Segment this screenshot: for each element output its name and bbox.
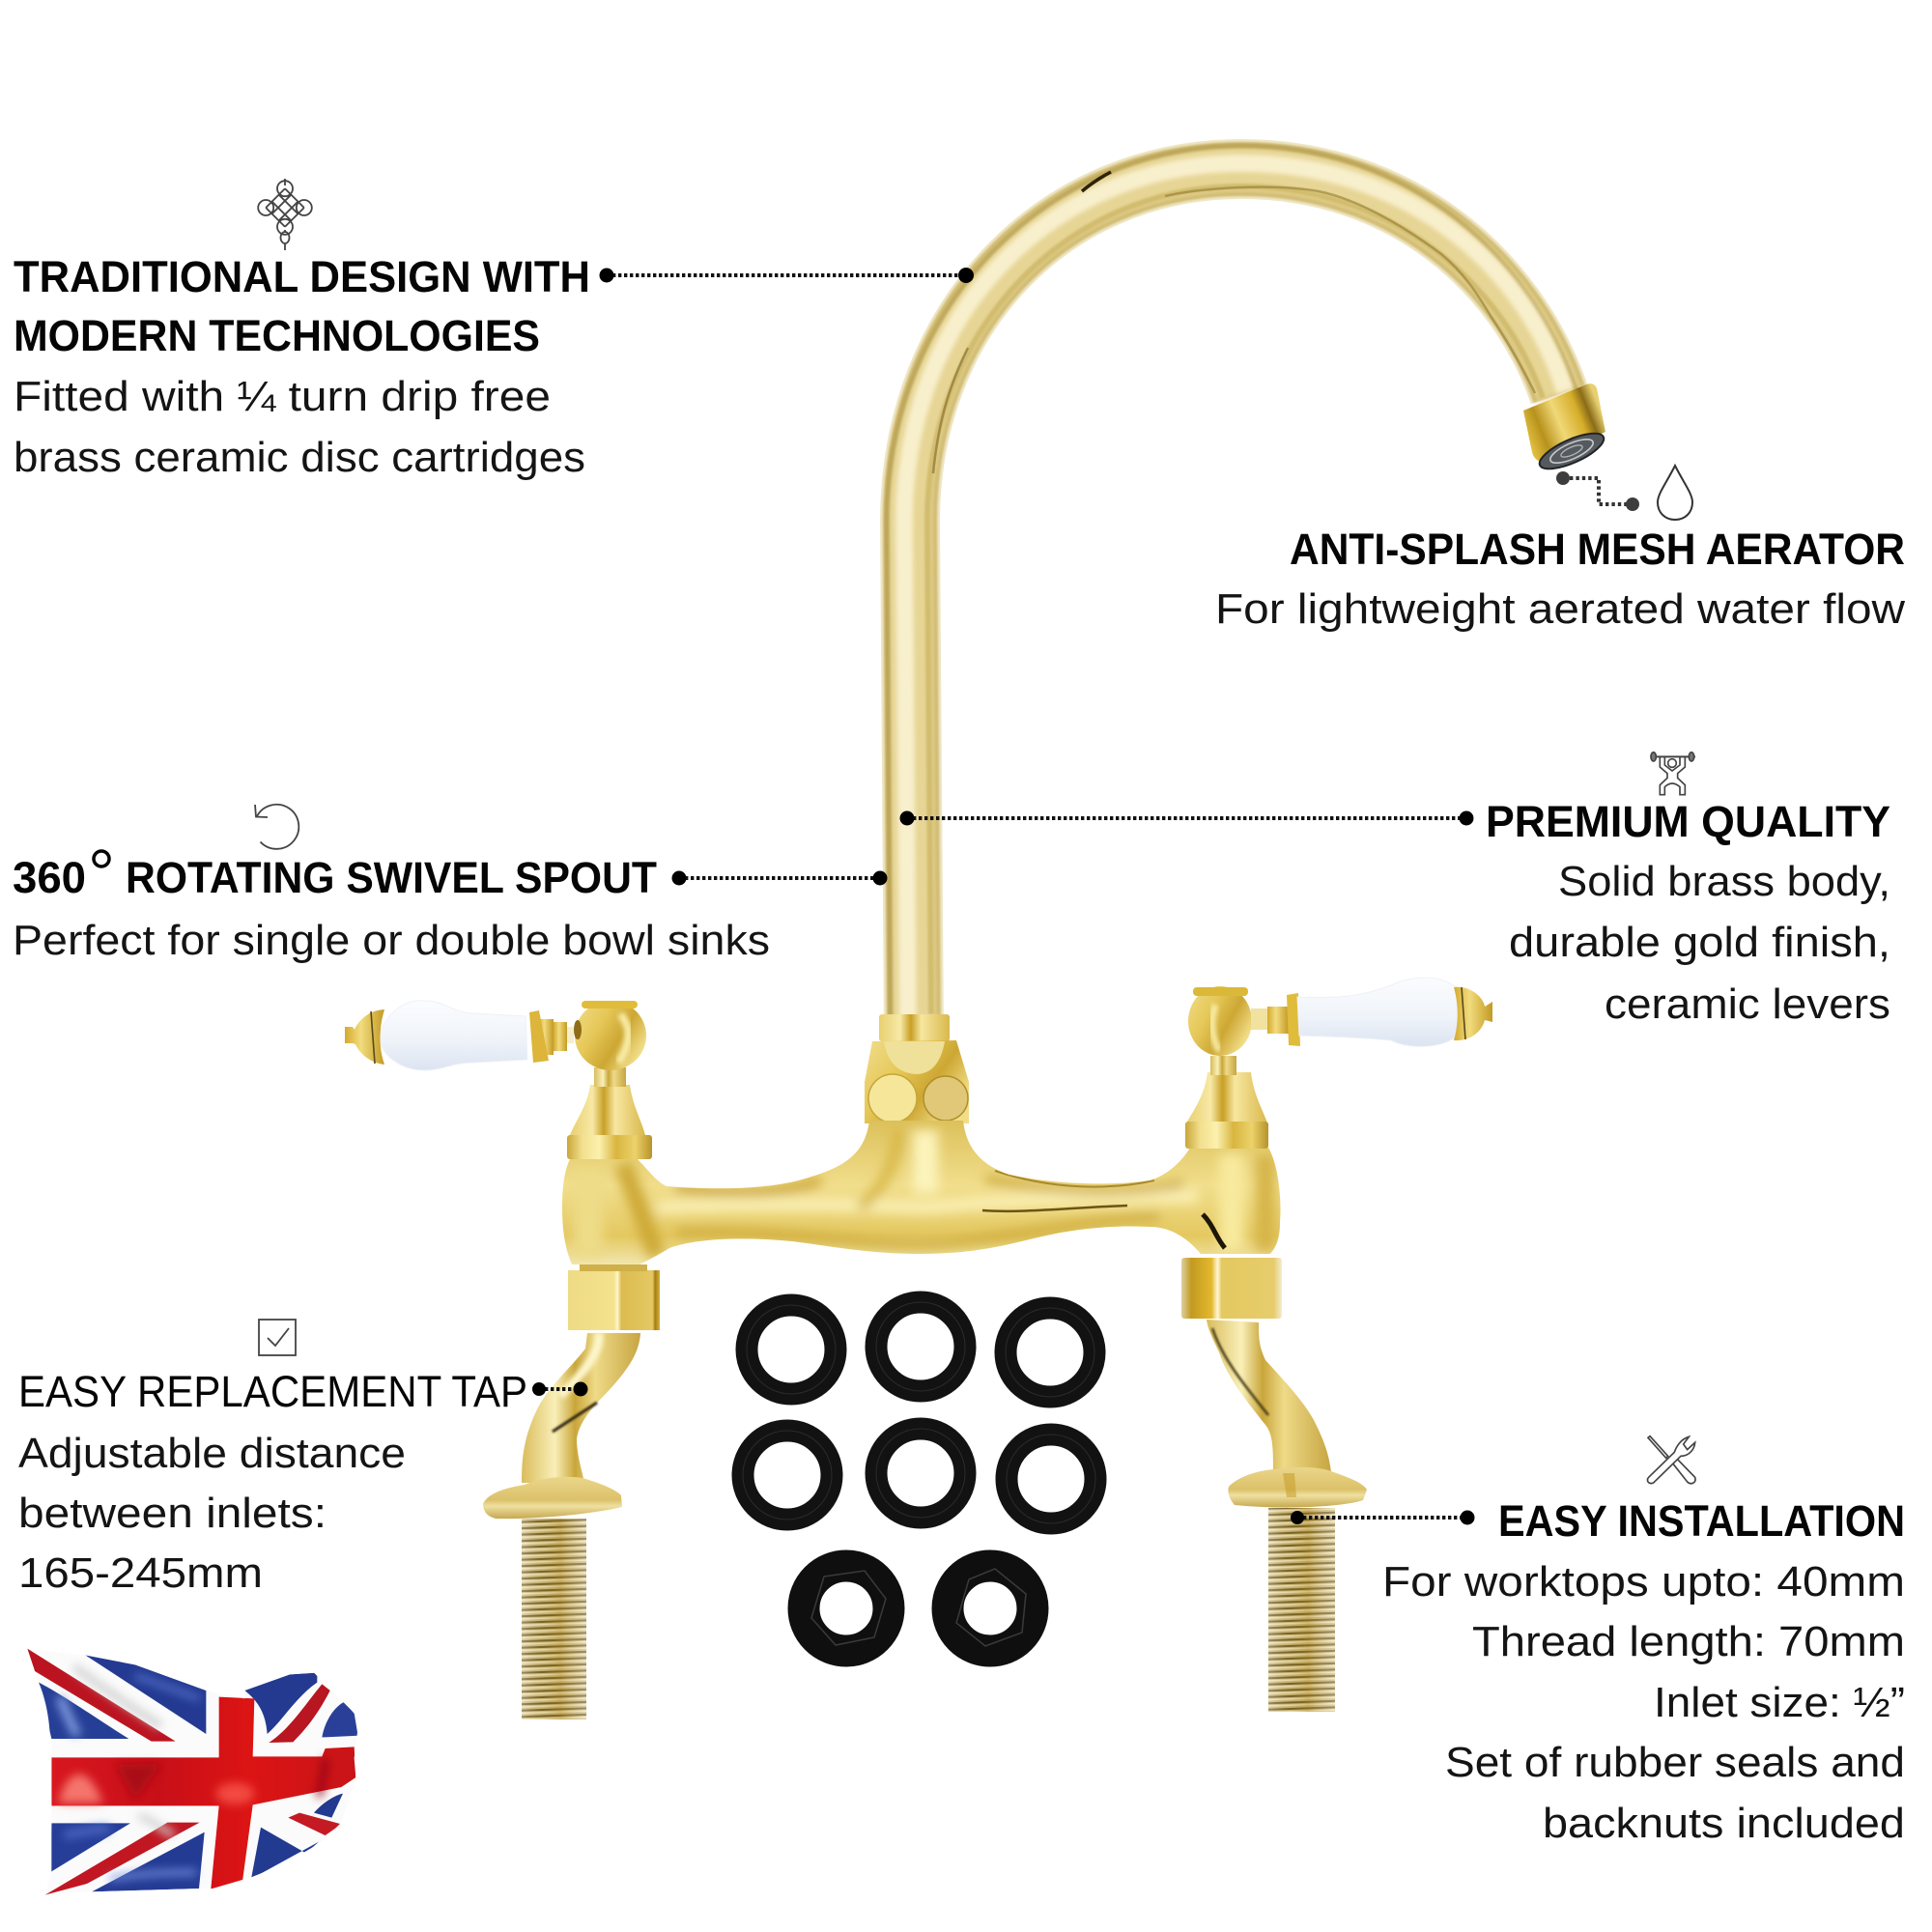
icon: knot: [255, 178, 315, 250]
block: easy replacement: 165-245mm: [18, 1549, 263, 1597]
icon: crossed tools: [1647, 1436, 1695, 1484]
block: easy installation: [1382, 1496, 1905, 1847]
leader: easy installation: [1291, 1511, 1474, 1524]
block: easy installation: For worktops upto: 40mm: [1382, 1558, 1905, 1605]
leader: premium quality: [900, 811, 1474, 825]
right lever and head: [1185, 978, 1492, 1149]
block: traditional design: Fitted with ¼ turn drip free: [14, 373, 551, 420]
spout tube: [887, 146, 1577, 1034]
leader: easy replacement: [532, 1381, 587, 1397]
block: easy replacement: Adjustable distance: [18, 1430, 406, 1477]
block: premium quality: [1486, 797, 1890, 1028]
backnut 2: [948, 1566, 1033, 1651]
block: easy replacement: between inlets:: [18, 1490, 327, 1537]
seal 4: [743, 1431, 832, 1520]
block: swivel spout: ROTATING SWIVEL SPOUT: [126, 853, 657, 902]
faucet illustration: [345, 146, 1608, 1719]
block: premium quality: durable gold finish,: [1509, 919, 1890, 966]
icon: water drop: [1658, 466, 1692, 520]
threaded stud left: [522, 1519, 586, 1719]
block: easy installation: Inlet size: ½”: [1654, 1679, 1905, 1726]
block: anti-splash aerator: ANTI-SPLASH MESH AERATOR: [1290, 525, 1905, 574]
icon: rotate arrow: [255, 805, 298, 849]
block: easy replacement: EASY REPLACEMENT TAP: [18, 1367, 527, 1416]
left nut and leg: [483, 1264, 660, 1519]
seal 3: [1006, 1308, 1094, 1397]
seal 5: [876, 1429, 965, 1518]
icon: weightlifter: [1650, 753, 1695, 795]
block: swivel spout: Perfect for single or double bowl sinks: [13, 917, 770, 964]
block: premium quality: Solid brass body,: [1558, 858, 1890, 905]
block: easy installation: Thread length: 70mm: [1472, 1618, 1905, 1665]
block: easy installation: backnuts included: [1543, 1800, 1905, 1847]
right nut and leg: [1181, 1258, 1367, 1507]
central hub: [865, 1014, 969, 1124]
block: traditional design: brass ceramic disc cartridges: [14, 434, 585, 481]
block: swivel spout: [13, 851, 770, 964]
block: anti-splash aerator: For lightweight aerated water flow: [1215, 585, 1905, 633]
block: traditional design: [14, 252, 590, 481]
block: traditional design: TRADITIONAL DESIGN WITH: [14, 252, 590, 301]
backnut 1: [804, 1566, 889, 1651]
rubber seals and backnuts: [743, 1302, 1095, 1651]
block: easy replacement: [18, 1367, 527, 1597]
bridge body: [562, 1121, 1281, 1264]
block: easy installation: Set of rubber seals and: [1445, 1739, 1905, 1786]
block: anti-splash aerator: [1215, 525, 1905, 633]
seal 6: [1007, 1435, 1095, 1523]
block: easy installation: EASY INSTALLATION: [1498, 1496, 1905, 1546]
block: traditional design: MODERN TECHNOLOGIES: [14, 311, 540, 360]
UK flag: [19, 1642, 367, 1900]
icon: checkbox: [259, 1320, 296, 1355]
seal 1: [747, 1305, 836, 1394]
leader: traditional design: [599, 268, 974, 283]
block: premium quality: ceramic levers: [1605, 980, 1890, 1028]
block: premium quality: PREMIUM QUALITY: [1486, 797, 1890, 846]
seal 2: [876, 1302, 965, 1391]
aerator: [1523, 384, 1608, 476]
block: swivel spout: 360: [13, 853, 86, 902]
left lever and head: [345, 1001, 652, 1159]
leader: aerator: [1556, 471, 1639, 511]
leader: swivel spout: [672, 871, 887, 885]
threaded stud right: [1268, 1508, 1335, 1712]
